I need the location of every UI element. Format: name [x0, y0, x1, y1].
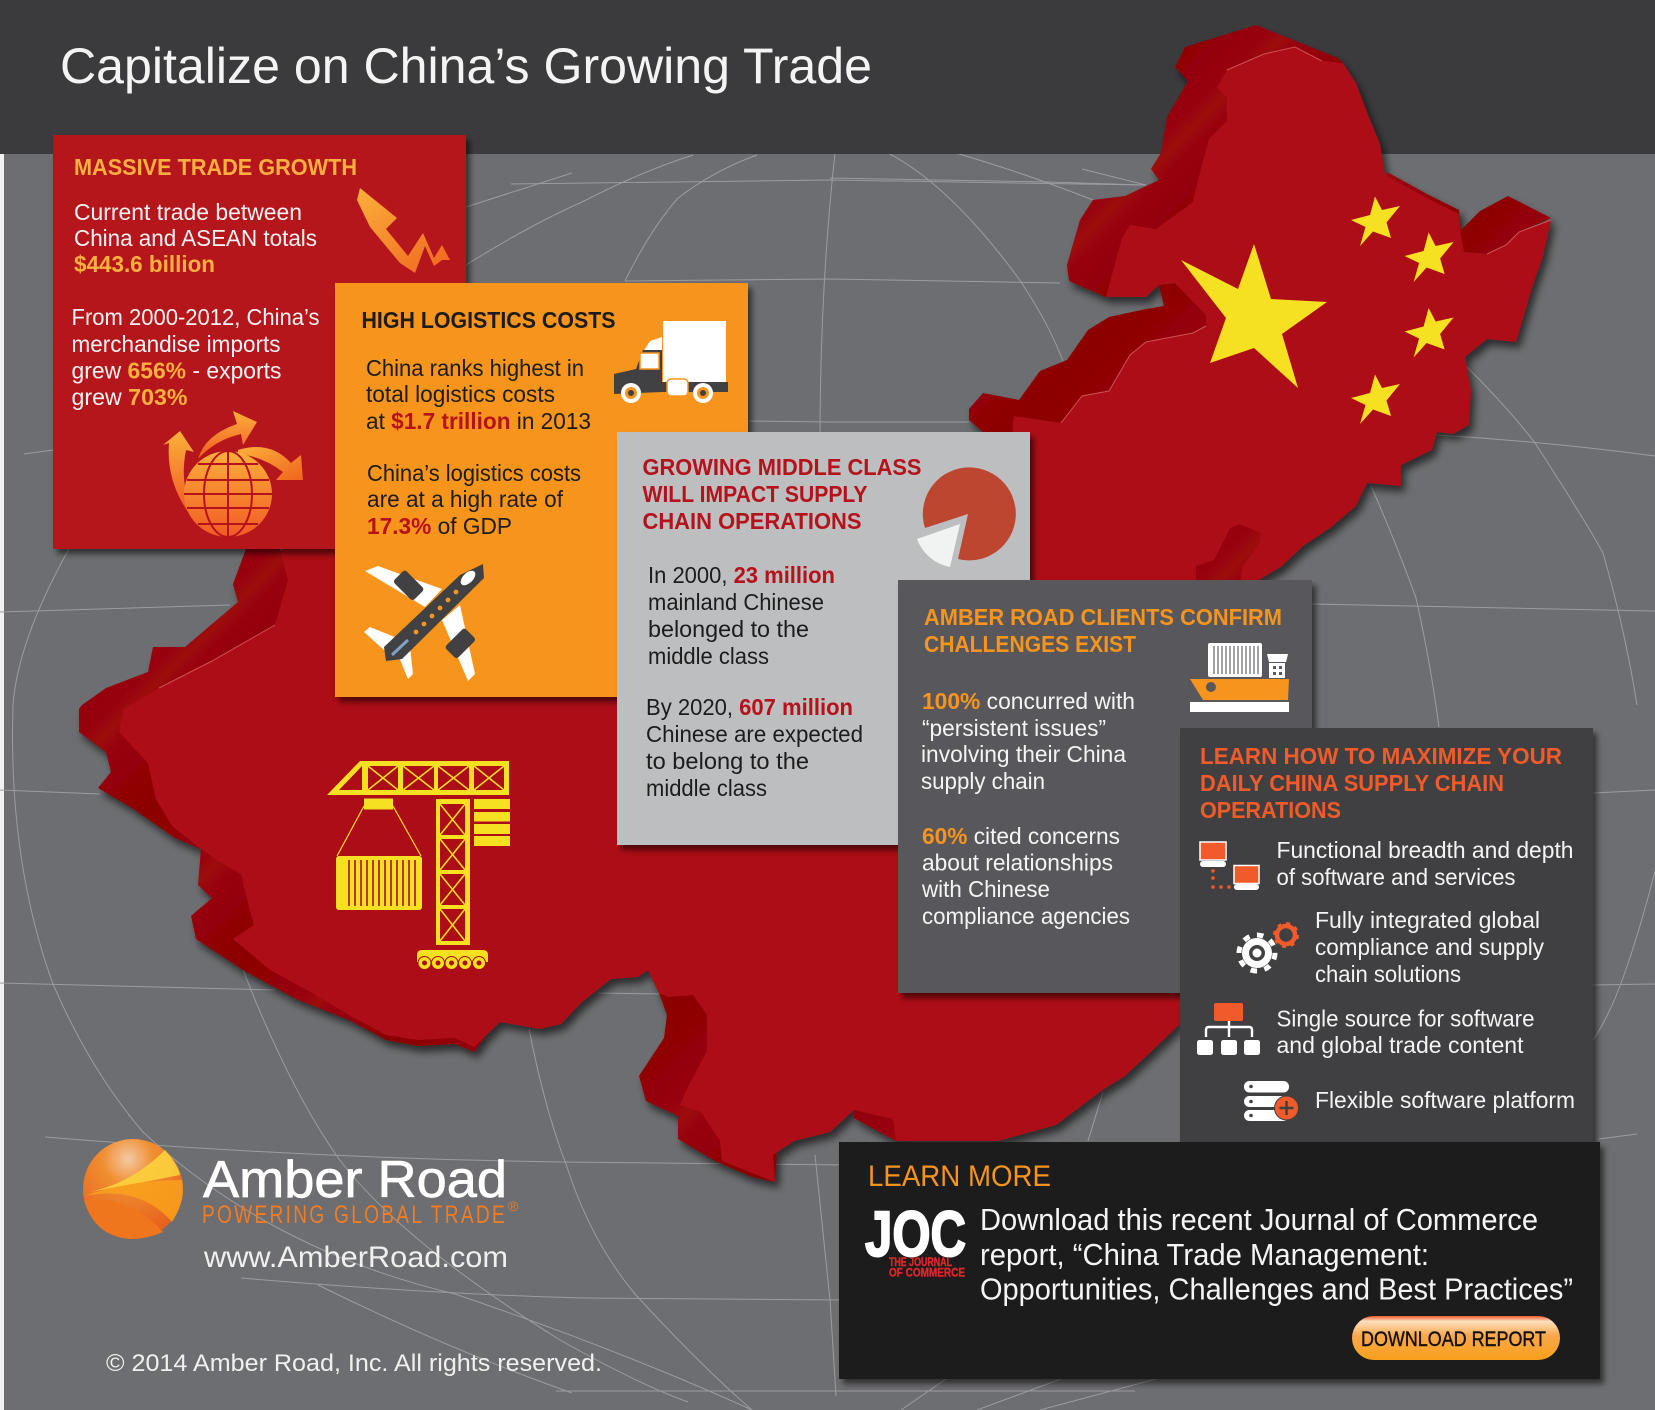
logo: JOC: THE JOURNAL: [889, 1255, 952, 1269]
header band: [0, 0, 1655, 154]
heading: massive trade growth: MASSIVE TRADE GROWTH: [74, 154, 357, 180]
text block: integrated solutions: chain solutions: [1315, 961, 1461, 987]
text block: report description: Download this recent Journal of Commerce: [980, 1202, 1538, 1237]
text block: 2000 figure: middle class: [648, 643, 769, 669]
text block: ASEAN trade: [74, 199, 317, 277]
panel: learn how to maximize: [1180, 728, 1593, 1142]
text block: 2020 figure: [646, 694, 863, 801]
text block: total logistics costs: China ranks highest in: [366, 355, 584, 381]
icon: flag stars: [1181, 196, 1454, 424]
heading: learn more: LEARN MORE: [868, 1160, 1051, 1193]
panel: growing middle class: [617, 432, 1030, 845]
text block: 2020 figure: middle class: [646, 775, 767, 801]
logo: JOC: JOC: [865, 1198, 966, 1270]
icon: crane with container: [327, 761, 510, 970]
icon: cargo ship: [1190, 643, 1289, 712]
text block: 60 percent: 60% cited concerns: [922, 823, 1120, 849]
map of China: [79, 25, 1551, 1182]
text block: single source: and global trade content: [1276, 1032, 1524, 1058]
text block: total logistics costs: [366, 355, 591, 434]
text block: 2020 figure: By 2020, 607 million: [646, 694, 853, 720]
heading: maximize supply chain: DAILY CHINA SUPPLY CHAIN: [1200, 770, 1504, 796]
logo: Amber Road: [83, 1139, 519, 1274]
icon: server stack: [1244, 1081, 1298, 1121]
icon: pie chart: [917, 467, 1016, 567]
text block: flexible platform: Flexible software platform: [1315, 1087, 1575, 1113]
heading: maximize supply chain: OPERATIONS: [1200, 797, 1341, 823]
text block: integrated solutions: Fully integrated global: [1315, 907, 1540, 933]
text block: imports and exports: [72, 304, 320, 410]
heading: growing middle class: CHAIN OPERATIONS: [642, 508, 862, 534]
icon: zigzag arrow: [357, 188, 450, 273]
text block: imports and exports: merchandise imports: [72, 331, 280, 357]
heading: clients confirm challenges: [924, 604, 1282, 657]
brand name: Amber Road: [203, 1151, 507, 1209]
text block: functional breadth: [1276, 837, 1574, 890]
text block: functional breadth: of software and services: [1276, 864, 1516, 890]
text block: percent of GDP: are at a high rate of: [367, 486, 564, 512]
text block: percent of GDP: China’s logistics costs: [367, 460, 581, 486]
text block: report description: Opportunities, Challenges and Best Practices”: [980, 1272, 1573, 1306]
heading: clients confirm challenges: CHALLENGES EXIST: [924, 631, 1136, 657]
text block: 60 percent: compliance agencies: [922, 903, 1130, 929]
heading: clients confirm challenges: AMBER ROAD CLIENTS CONFIRM: [924, 604, 1282, 630]
icon: amber sphere: [83, 1139, 183, 1239]
panel: learn more: [839, 1142, 1600, 1379]
text block: integrated solutions: [1315, 907, 1544, 987]
text block: 100 percent: “persistent issues”: [922, 715, 1106, 741]
heading: growing middle class: GROWING MIDDLE CLASS: [642, 454, 922, 480]
text block: 100 percent: [921, 688, 1135, 794]
text block: total logistics costs: total logistics costs: [366, 381, 555, 407]
text block: ASEAN trade: $443.6 billion: [74, 251, 215, 277]
text block: 2020 figure: Chinese are expected: [646, 721, 863, 747]
heading: maximize supply chain: LEARN HOW TO MAXIMIZE YOUR: [1200, 743, 1562, 769]
button: download report: [1352, 1316, 1560, 1360]
logo: JOC: OF COMMERCE: [889, 1266, 965, 1280]
text block: report description: [980, 1202, 1573, 1306]
icon: truck: [614, 321, 728, 403]
text block: 2000 figure: belonged to the: [648, 616, 809, 642]
icon: airplane: [364, 564, 484, 681]
copyright: © 2014 Amber Road, Inc. All rights reserved.: [106, 1350, 602, 1377]
text block: 2020 figure: to belong to the: [646, 748, 809, 774]
website: www.AmberRoad.com: [203, 1241, 508, 1274]
text block: 100 percent: involving their China: [921, 741, 1126, 767]
text block: functional breadth: Functional breadth and depth: [1276, 837, 1574, 863]
icon: org chart: [1197, 1003, 1260, 1055]
text block: imports and exports: grew 656% - exports: [72, 358, 282, 384]
text block: imports and exports: From 2000-2012, China’s: [72, 304, 320, 330]
button: download report: DOWNLOAD REPORT: [1361, 1328, 1546, 1351]
logo: Amber Road: ®: [508, 1198, 519, 1214]
text block: single source: [1276, 1006, 1534, 1058]
text block: 60 percent: about relationships: [922, 850, 1113, 876]
text block: ASEAN trade: Current trade between: [74, 199, 302, 225]
text block: 2000 figure: [648, 562, 835, 669]
panel: massive trade growth: [53, 135, 466, 549]
text block: ASEAN trade: China and ASEAN totals: [74, 225, 317, 251]
text block: 2000 figure: mainland Chinese: [648, 589, 824, 615]
icon: globe with arrows: [163, 411, 303, 537]
text block: integrated solutions: compliance and supply: [1315, 934, 1544, 960]
text block: total logistics costs: at $1.7 trillion in 2013: [366, 408, 591, 434]
text block: 2000 figure: In 2000, 23 million: [648, 562, 835, 588]
text block: report description: report, “China Trade Management:: [980, 1237, 1429, 1272]
panel: amber road clients: [898, 580, 1312, 993]
logo: JOC: [865, 1198, 966, 1280]
heading: growing middle class: WILL IMPACT SUPPLY: [642, 481, 868, 507]
text block: 100 percent: 100% concurred with: [922, 688, 1135, 714]
text block: percent of GDP: [367, 460, 581, 539]
tagline: POWERING GLOBAL TRADE: [202, 1201, 507, 1229]
title: Capitalize on China’s Growing Trade: [60, 38, 872, 94]
heading: high logistics costs: HIGH LOGISTICS COSTS: [362, 307, 616, 333]
text block: 100 percent: supply chain: [921, 768, 1045, 794]
panel: high logistics costs: [335, 283, 748, 697]
text block: single source: Single source for software: [1276, 1006, 1534, 1032]
text block: 60 percent: [921, 823, 1130, 929]
text block: 60 percent: with Chinese: [921, 876, 1050, 902]
text block: percent of GDP: 17.3% of GDP: [367, 513, 512, 539]
icon: gears: [1239, 924, 1298, 971]
text block: imports and exports: grew 703%: [72, 384, 188, 410]
heading: maximize supply chain: [1200, 743, 1562, 823]
icon: two computers: [1200, 842, 1259, 890]
heading: growing middle class: [642, 454, 922, 534]
